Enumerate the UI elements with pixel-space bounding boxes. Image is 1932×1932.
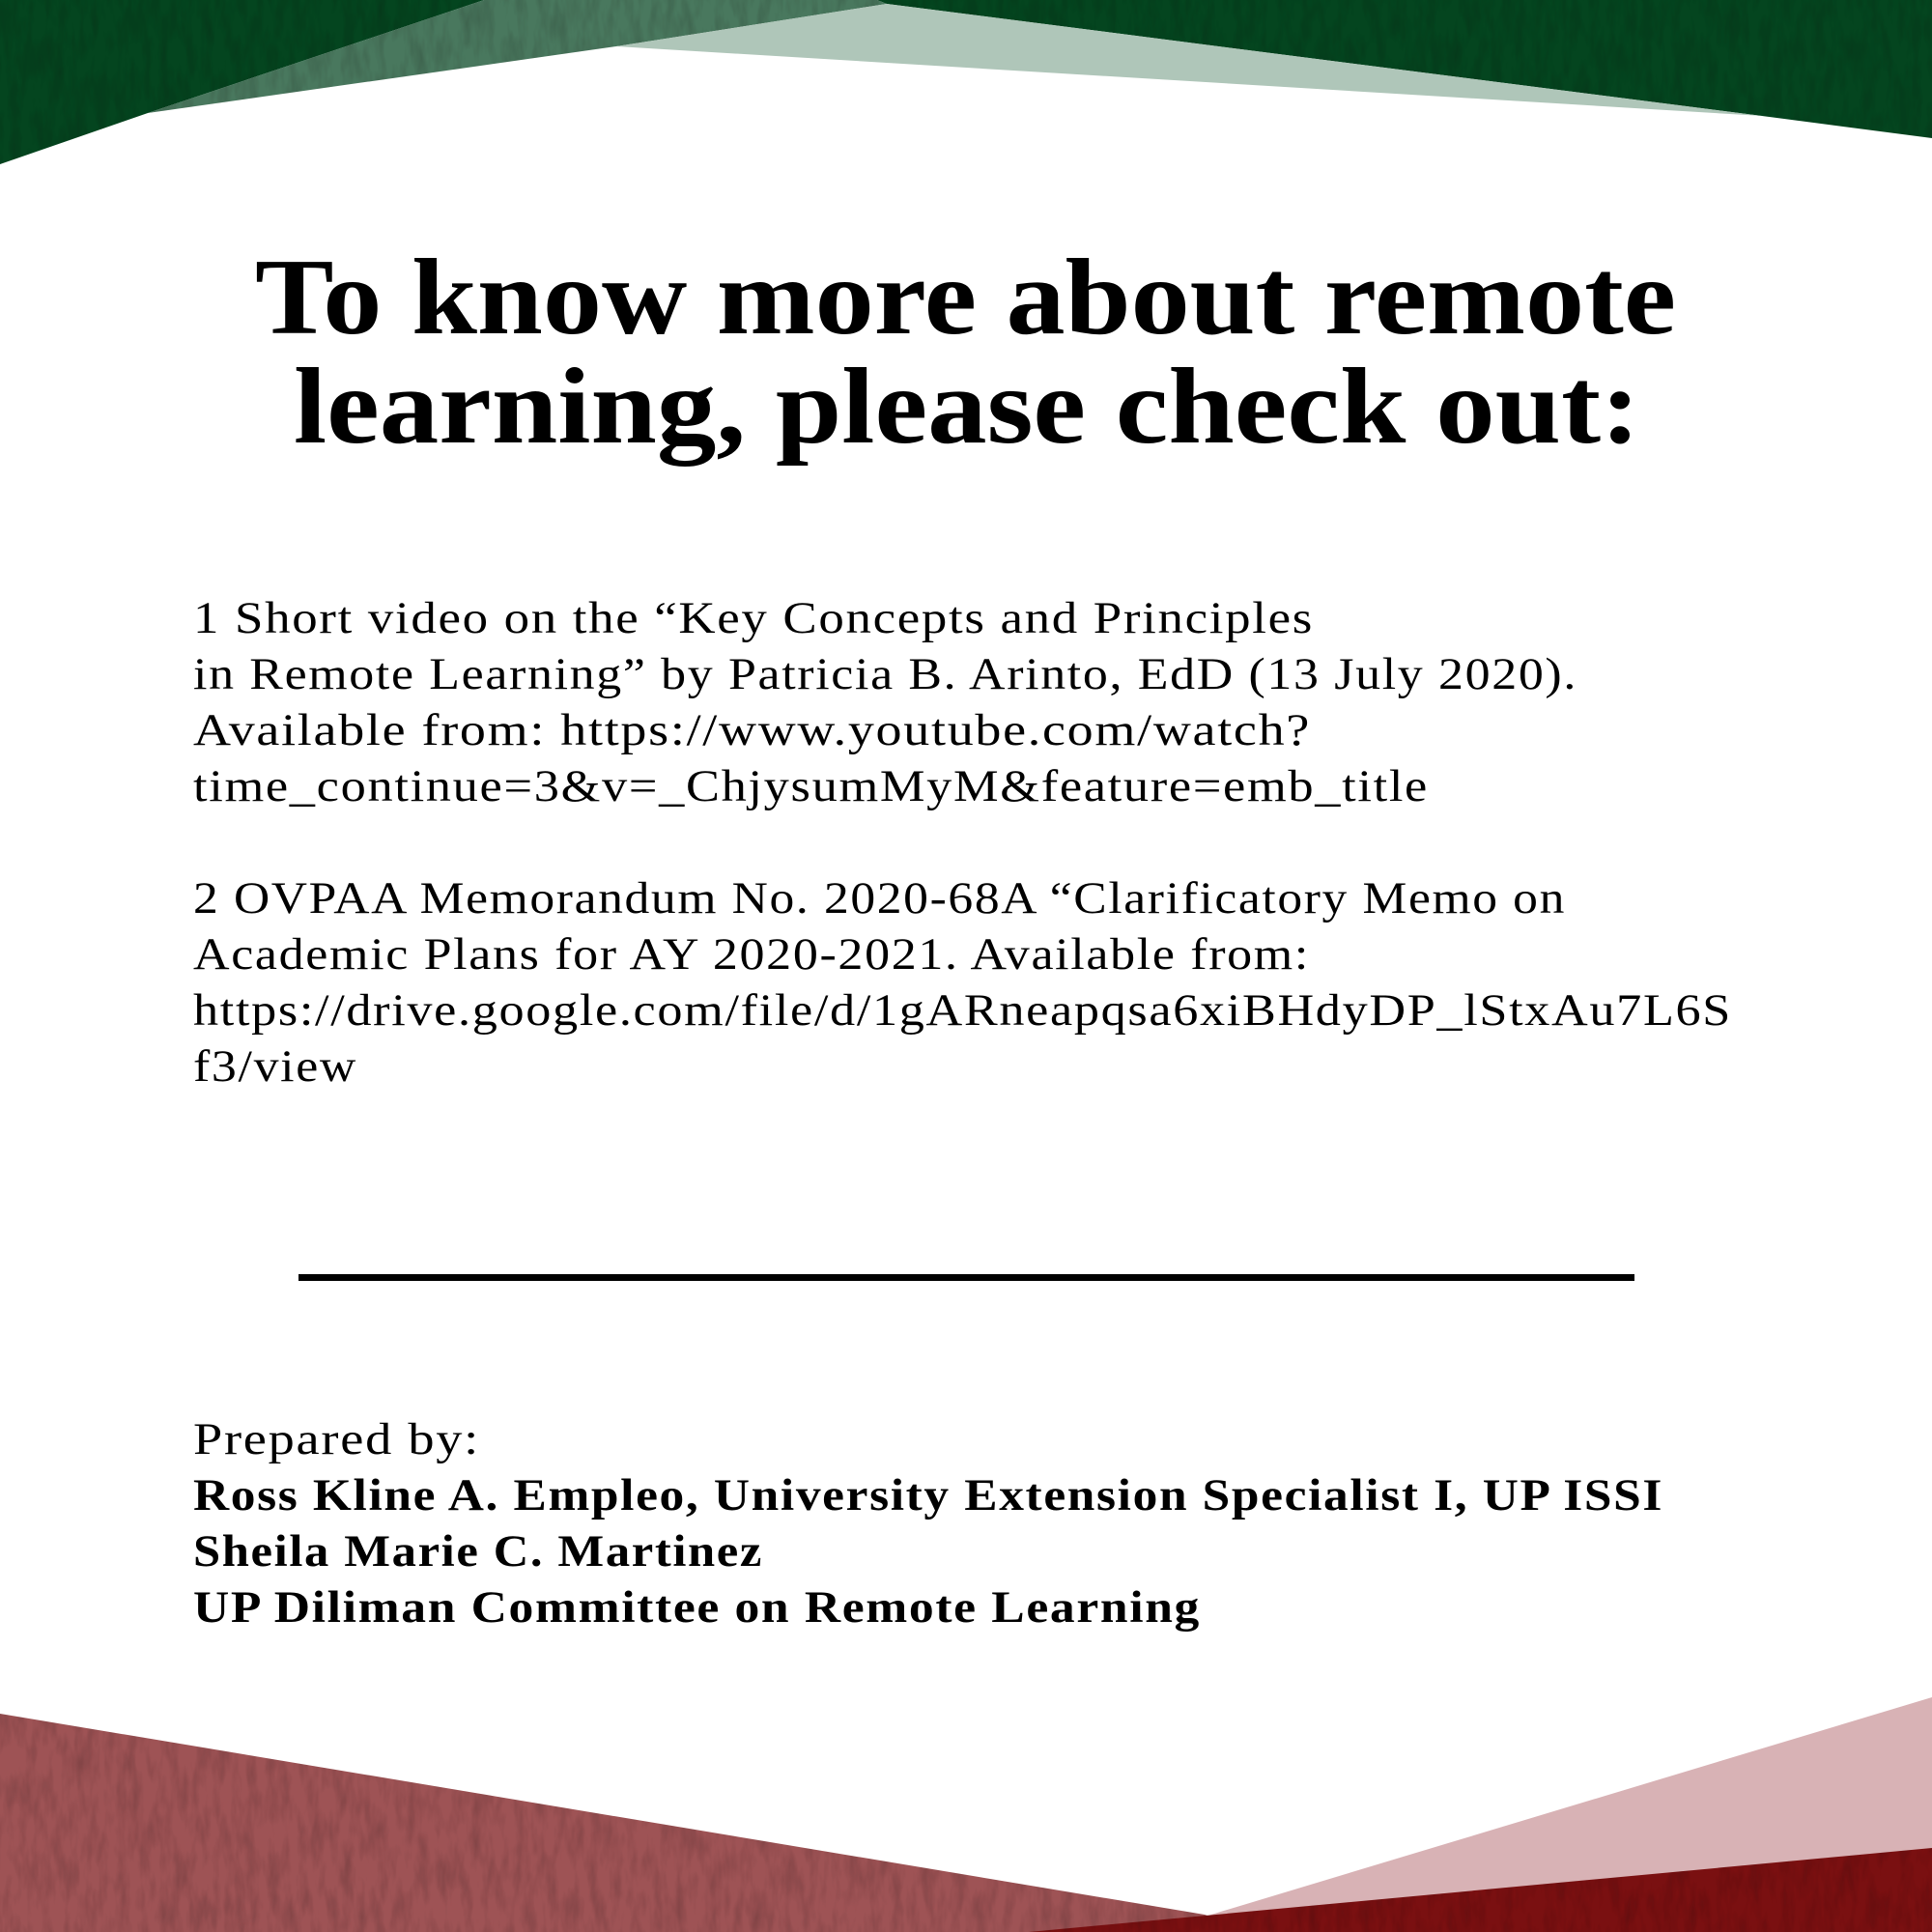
prepared by credits: Sheila Marie C. Martinez bbox=[193, 1526, 763, 1577]
top green banner bbox=[0, 0, 1932, 164]
reference 2: OVPAA memorandum bbox=[193, 873, 1732, 1092]
reference 2: OVPAA memorandum: Academic Plans for AY 2020-2021. Available from: bbox=[193, 929, 1310, 980]
light green triangle bbox=[616, 4, 1762, 116]
reference 1: short video: time_continue=3&v=_ChjysumMyM&feature=emb_title bbox=[193, 761, 1429, 811]
reference 2: OVPAA memorandum: https://drive.google.com/file/d/1gARneapqsa6xiBHdyDP_lStxAu7L6S bbox=[193, 985, 1732, 1036]
title: To know more about remote bbox=[255, 238, 1676, 357]
mid red shape bbox=[0, 1714, 1256, 1932]
title bbox=[255, 238, 1676, 467]
reference 2: OVPAA memorandum: 2 OVPAA Memorandum No. 2020-68A “Clarificatory Memo on bbox=[193, 873, 1566, 923]
mid green triangle bbox=[148, 0, 887, 113]
reference 1: short video bbox=[193, 593, 1577, 811]
prepared by credits: Ross Kline A. Empleo, University Extension Specialist I, UP ISSI bbox=[193, 1470, 1663, 1520]
reference 1: short video: in Remote Learning” by Patricia B. Arinto, EdD (13 July 2020). bbox=[193, 649, 1577, 699]
prepared by credits: UP Diliman Committee on Remote Learning bbox=[193, 1582, 1201, 1633]
title: learning, please check out: bbox=[294, 347, 1640, 467]
prepared by credits: Prepared by: bbox=[193, 1414, 480, 1464]
divider line bbox=[298, 1274, 1634, 1281]
dark red shape bbox=[1029, 1848, 1932, 1932]
reference 1: short video: Available from: https://www.youtube.com/watch? bbox=[193, 705, 1311, 755]
reference 1: short video: 1 Short video on the “Key Concepts and Principles bbox=[193, 593, 1314, 643]
light red triangle bbox=[1205, 1697, 1932, 1932]
prepared by credits bbox=[193, 1414, 1663, 1633]
dark green shape bbox=[0, 0, 1932, 164]
reference 2: OVPAA memorandum: f3/view bbox=[193, 1041, 357, 1092]
bottom red banner bbox=[0, 1697, 1932, 1932]
